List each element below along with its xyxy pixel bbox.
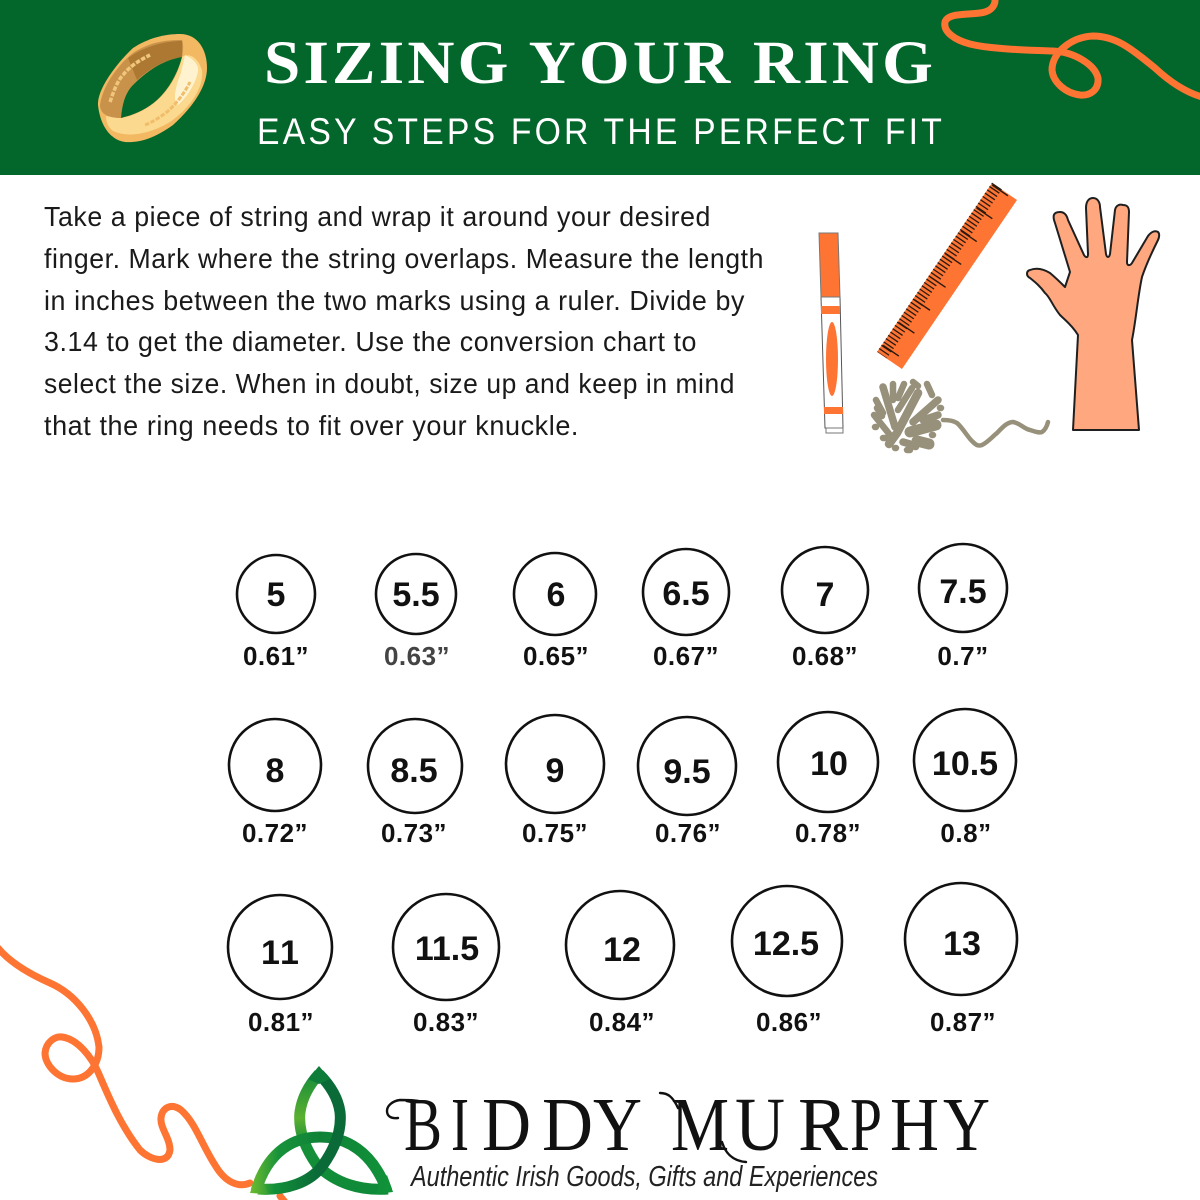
- header banner: [0, 0, 1200, 175]
- size 13: 0.87”: [930, 1007, 996, 1037]
- logo: wordmark: D: [542, 1083, 593, 1167]
- icon: orange ruler: [877, 183, 1017, 369]
- instructions text: [44, 201, 764, 441]
- row 1 rings: [237, 544, 1007, 671]
- size 11.5: 11.5: [415, 930, 479, 968]
- logo: wordmark: D: [482, 1083, 531, 1167]
- size 11: 0.81”: [248, 1007, 314, 1037]
- logo: wordmark: Y: [943, 1083, 990, 1167]
- icon: hand: [1027, 198, 1159, 430]
- size 6: 0.65”: [523, 641, 589, 671]
- ring size chart: [228, 544, 1017, 1037]
- size 7: 0.68”: [792, 641, 858, 671]
- size 11.5: [393, 894, 499, 1037]
- letter flourishes: [387, 1093, 746, 1162]
- size 5: 0.61”: [243, 641, 309, 671]
- icon: gold ring: [98, 34, 207, 142]
- size 11: [228, 895, 332, 1037]
- size 7.5: [919, 544, 1007, 671]
- size 5.5: 5.5: [392, 576, 440, 614]
- size 9: [506, 715, 604, 848]
- size 11: 11: [261, 934, 301, 972]
- size 7: [782, 547, 868, 671]
- size 5: [237, 555, 315, 671]
- logo: wordmark: I: [451, 1083, 469, 1167]
- size 10.5: 0.8”: [940, 818, 992, 848]
- subtitle: EASY STEPS FOR THE PERFECT FIT: [257, 111, 945, 152]
- size 13: 13: [943, 925, 981, 963]
- logo: wordmark: Y: [593, 1083, 642, 1167]
- instructions text: Take a piece of string and wrap it around your desired: [44, 201, 711, 232]
- logo: tagline: Authentic Irish Goods, Gifts and Experiences: [409, 1161, 878, 1193]
- row 3 rings: [228, 883, 1017, 1037]
- size 12: 0.84”: [589, 1007, 655, 1037]
- size 6.5: 6.5: [662, 575, 710, 613]
- logo: wordmark: M: [671, 1083, 729, 1167]
- logo: wordmark: P: [850, 1083, 882, 1167]
- instructions text: that the ring needs to fit over your knuckle.: [44, 410, 579, 441]
- size 6: [514, 553, 596, 671]
- instructions text: 3.14 to get the diameter. Use the conversion chart to: [44, 326, 697, 357]
- size 9.5: [638, 717, 736, 848]
- decorative orange string: top: [945, 0, 1200, 97]
- size 12: [566, 891, 674, 1037]
- logo: wordmark: [387, 1083, 990, 1167]
- size 8.5: [368, 719, 462, 848]
- size 9: 0.75”: [522, 818, 588, 848]
- size 9.5: 0.76”: [655, 818, 721, 848]
- size 12: 12: [603, 931, 641, 969]
- size 7.5: 0.7”: [937, 641, 989, 671]
- size 8: [229, 719, 321, 848]
- decorative orange string: bottom: [0, 948, 285, 1200]
- size 8.5: 8.5: [390, 752, 438, 790]
- size 8: 8: [266, 752, 284, 790]
- size 5.5: [376, 554, 456, 671]
- size 9.5: 9.5: [663, 753, 711, 791]
- size 6.5: [643, 549, 729, 671]
- size 8: 0.72”: [242, 818, 308, 848]
- logo: triquetra knot: [250, 1066, 393, 1194]
- logo: wordmark: U: [735, 1083, 785, 1167]
- logo: wordmark: H: [890, 1083, 939, 1167]
- instructions text: in inches between the two marks using a ruler. Divide by: [44, 285, 745, 316]
- icon: orange marker: [819, 233, 843, 433]
- size 7: 7: [816, 576, 834, 614]
- size 13: [905, 883, 1017, 1037]
- icon: yarn ball: [874, 382, 1048, 450]
- logo: wordmark: B: [404, 1083, 442, 1167]
- size 6: 6: [547, 576, 565, 614]
- size 11.5: 0.83”: [413, 1007, 479, 1037]
- row 2 rings: [229, 709, 1016, 848]
- size 10: [778, 712, 878, 848]
- size 10: 10: [810, 745, 848, 783]
- size 5.5: 0.63”: [384, 641, 450, 671]
- size 5: 5: [267, 576, 285, 614]
- instructions text: select the size. When in doubt, size up and keep in mind: [44, 368, 735, 399]
- size 10.5: [914, 709, 1016, 848]
- size 12.5: 12.5: [753, 925, 819, 963]
- size 10: 0.78”: [795, 818, 861, 848]
- size 6.5: 0.67”: [653, 641, 719, 671]
- size 12.5: 0.86”: [756, 1007, 822, 1037]
- size 8.5: 0.73”: [381, 818, 447, 848]
- size 12.5: [732, 886, 842, 1037]
- yarn tail: [943, 420, 1048, 446]
- title: SIZING YOUR RING: [264, 30, 936, 97]
- size 9: 9: [546, 752, 564, 790]
- logo: wordmark: R: [798, 1083, 848, 1167]
- size 7.5: 7.5: [939, 573, 987, 611]
- size 10.5: 10.5: [932, 745, 998, 783]
- instructions text: finger. Mark where the string overlaps. Measure the length: [44, 243, 764, 274]
